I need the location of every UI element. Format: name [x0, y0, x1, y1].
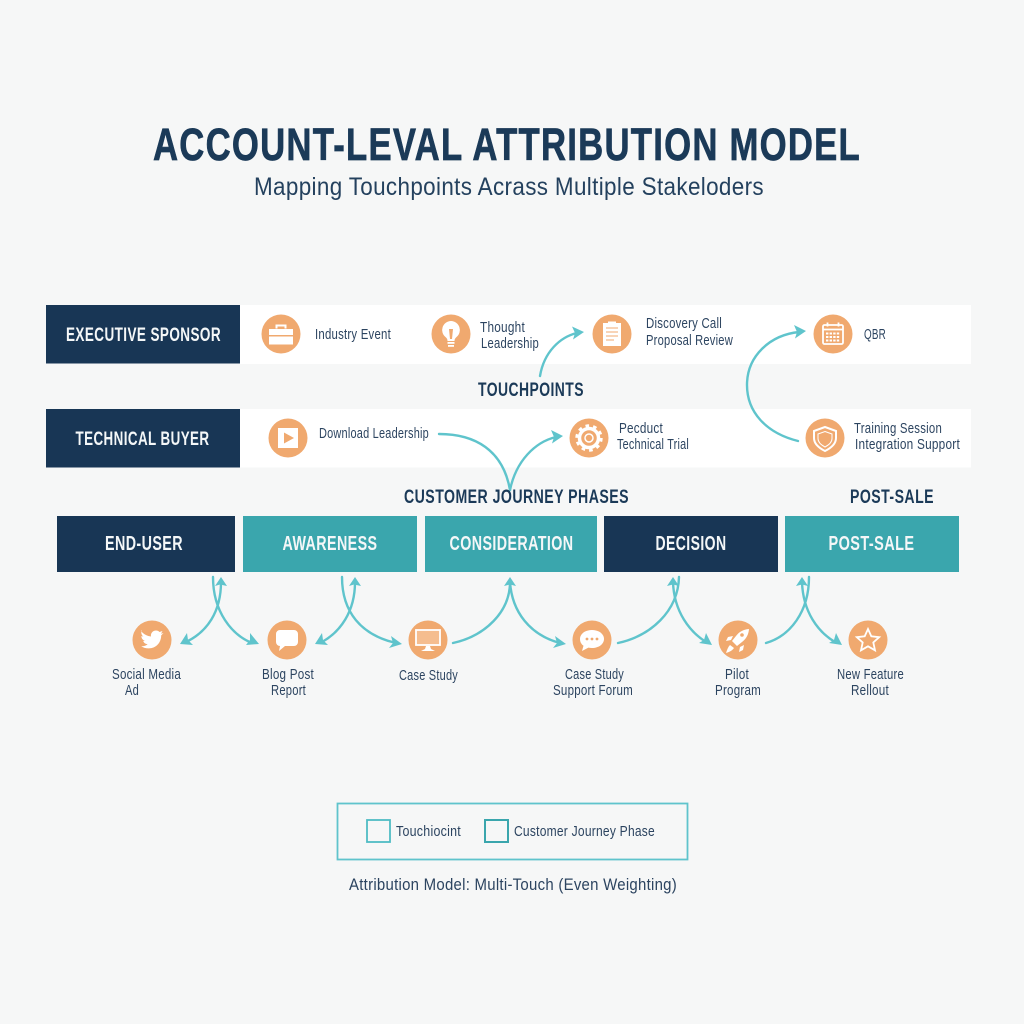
icon: rocket — [718, 620, 758, 660]
heading: touchpoints: TOUCHPOINTS — [478, 380, 584, 401]
text: social media ad label: Social Media — [112, 666, 181, 683]
label: executive sponsor — [46, 305, 240, 364]
text: product technical trial: Pecduct — [619, 420, 663, 437]
text: thought leadership: Leadership — [481, 335, 539, 352]
legend swatch: touchpoint — [367, 820, 390, 842]
icon: chat dots — [572, 620, 612, 660]
phase: consideration — [425, 516, 597, 572]
icon: calendar — [814, 314, 852, 354]
text: case study support forum label: Case Study — [565, 666, 624, 683]
text: social media ad label: Ad — [125, 682, 139, 699]
text: download leadership: Download Leadership — [319, 425, 429, 442]
icon: play button — [268, 418, 308, 458]
panel: executive sponsor row — [46, 305, 971, 364]
arrow: thought leadership to discovery call — [540, 326, 584, 376]
text: industry event: Industry Event — [315, 326, 391, 343]
touchpoint: pilot program — [715, 620, 761, 699]
heading: customer journey phases: CUSTOMER JOURNEY PHASES — [404, 487, 629, 508]
legend — [338, 804, 688, 860]
text: new feature rollout label: New Feature — [837, 666, 904, 683]
icon: star — [848, 620, 888, 660]
text: new feature rollout label: Rellout — [851, 682, 889, 699]
icon: light bulb — [432, 314, 470, 354]
subtitle: Mapping Touchpoints Acrass Multiple Stakeloders — [254, 173, 764, 201]
text: training session integration support: Integration Support — [855, 436, 960, 453]
icon: speech bubble — [268, 620, 306, 660]
touchpoint: blog post report — [262, 620, 314, 699]
panel: technical buyer row — [46, 409, 971, 468]
text: blog post report label: Report — [271, 682, 306, 699]
text: pilot program label: Program — [715, 682, 761, 699]
text: new feature rollout label — [837, 666, 904, 699]
phase: end-user — [57, 516, 235, 572]
phase: awareness: AWARENESS — [282, 532, 378, 555]
arrow: phases to product trial — [510, 430, 563, 490]
text: qbr: QBR — [864, 326, 886, 343]
icon: briefcase — [262, 314, 300, 354]
arrows: decision group — [618, 577, 712, 645]
text: product technical trial — [617, 420, 689, 453]
touchpoint: case study support forum — [553, 620, 633, 699]
text: blog post report label — [262, 666, 314, 699]
text: case study support forum label: Support Forum — [553, 682, 633, 699]
text: training session integration support: Training Session — [854, 420, 942, 437]
icon: shield — [806, 418, 844, 458]
phase: awareness — [243, 516, 417, 572]
icon: clipboard — [592, 314, 632, 354]
touchpoint: new feature rollout — [837, 620, 904, 699]
phase: decision — [604, 516, 778, 572]
label: technical buyer: TECHNICAL BUYER — [76, 428, 210, 450]
phase: post-sale — [785, 516, 959, 572]
arrow: download leadership into phases — [439, 434, 510, 490]
arrows: post-sale group — [766, 577, 842, 645]
arrows: end-user group — [180, 577, 259, 645]
arrows: awareness group — [315, 577, 402, 648]
text: training session integration support — [854, 420, 960, 453]
heading: post-sale: POST-SALE — [850, 487, 934, 508]
text: thought leadership: Thought — [480, 319, 525, 336]
text: blog post report label: Blog Post — [262, 666, 314, 683]
phase: post-sale: POST-SALE — [828, 532, 914, 555]
legend swatch: customer journey phase — [485, 820, 508, 842]
phase: consideration: CONSIDERATION — [450, 532, 574, 555]
arrow: training session to qbr — [747, 325, 806, 441]
text: thought leadership — [480, 319, 539, 352]
legend text: touchpoint: Touchiocint — [396, 823, 461, 840]
touchpoint: social media ad — [112, 620, 181, 699]
icon: gear — [570, 418, 608, 458]
label: executive sponsor: EXECUTIVE SPONSOR — [66, 324, 221, 346]
touchpoint: case study — [399, 620, 458, 684]
legend text: customer journey phase: Customer Journey Phase — [514, 823, 655, 840]
text: product technical trial: Technical Trial — [617, 436, 689, 453]
phase: end-user: END-USER — [105, 532, 183, 555]
label: technical buyer — [46, 409, 240, 468]
text: discovery call proposal review: Discovery Call — [646, 315, 722, 332]
text: pilot program label: Pilot — [725, 666, 749, 683]
text: case study label: Case Study — [399, 667, 458, 684]
text: pilot program label — [715, 666, 761, 699]
icon: monitor — [408, 620, 448, 660]
caption: attribution model: Attribution Model: Multi-Touch (Even Weighting) — [349, 875, 677, 894]
text: social media ad label — [112, 666, 181, 699]
text: case study support forum label — [553, 666, 633, 699]
icon: bird — [132, 620, 172, 660]
text: discovery call proposal review: Proposal Review — [646, 332, 733, 349]
text: discovery call proposal review — [646, 315, 733, 349]
phase: decision: DECISION — [656, 532, 726, 555]
arrows: consideration group — [453, 577, 566, 648]
